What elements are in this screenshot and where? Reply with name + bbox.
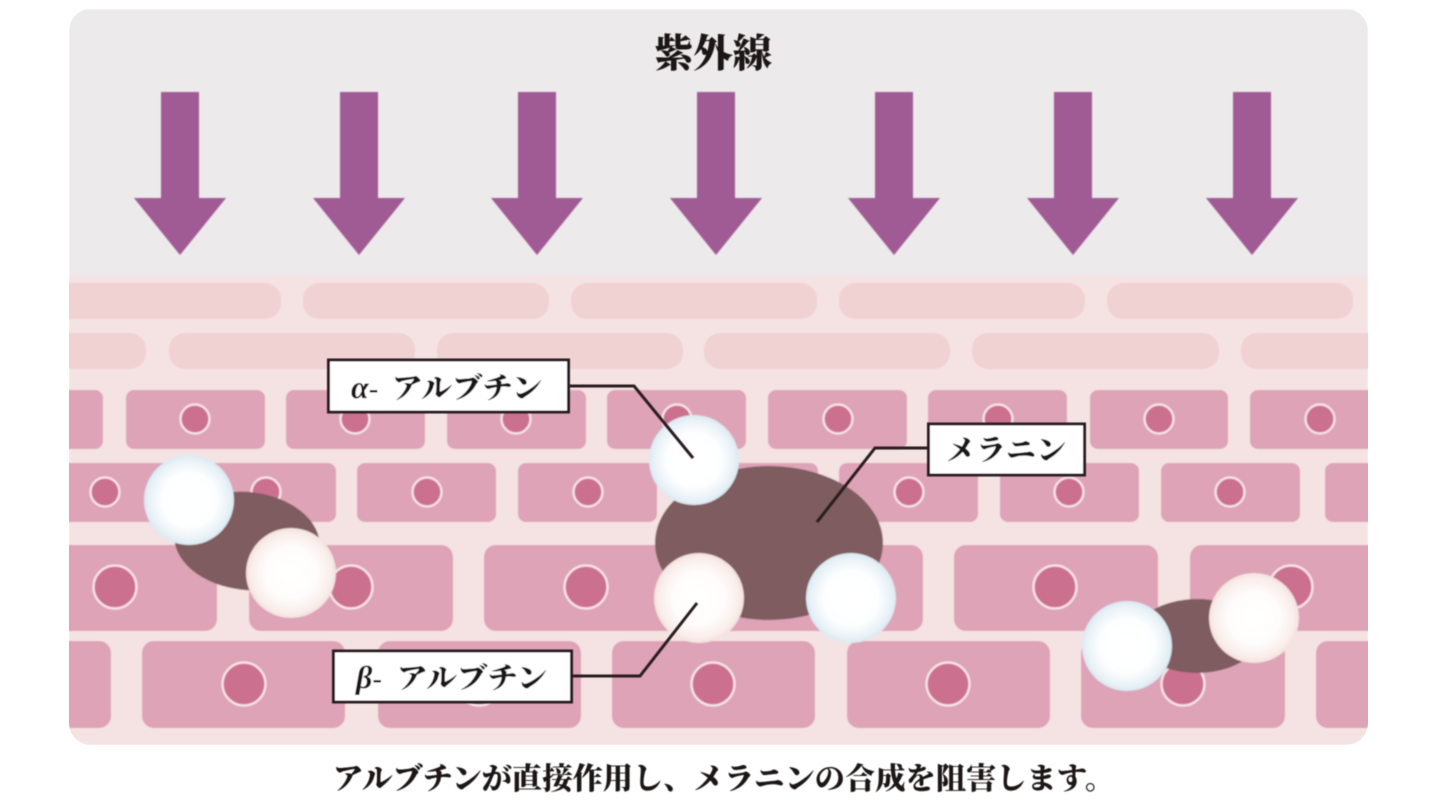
arrow 3	[491, 92, 583, 255]
arrow 2	[313, 92, 405, 255]
sphere: alpha-arbutin right	[1082, 601, 1172, 691]
sphere: beta-arbutin center	[654, 553, 744, 643]
cell row 4	[40, 463, 1405, 522]
title: 紫外線	[654, 33, 772, 76]
callout: melanin: メラニン	[946, 435, 1066, 467]
melanin: left	[174, 490, 320, 592]
callout: beta-arbutin	[334, 603, 697, 702]
callout: melanin	[817, 424, 1084, 522]
melanin: center	[655, 466, 883, 620]
sphere: alpha-arbutin center right	[806, 553, 896, 643]
callout: alpha-arbutin	[328, 360, 693, 458]
callout: alpha-arbutin: α-	[351, 369, 378, 405]
melanin: right	[1153, 598, 1242, 674]
callout: beta-arbutin: β-	[356, 659, 382, 695]
cell row 5	[40, 545, 1400, 631]
arrow 6	[1027, 92, 1119, 255]
panel: skin background	[69, 275, 1368, 745]
cell row 3	[40, 390, 1400, 449]
cell row 6	[40, 641, 1406, 728]
sphere: alpha-arbutin center top	[649, 415, 739, 505]
arrow 4	[670, 92, 762, 255]
arrows: ultraviolet rays	[134, 92, 1298, 255]
sphere: alpha-arbutin left	[144, 455, 234, 545]
callout: beta-arbutin: アルブチン	[397, 662, 547, 695]
stratum corneum row 2	[40, 333, 1401, 369]
arrow 5	[848, 92, 940, 255]
sphere: beta-arbutin right	[1209, 573, 1299, 663]
sphere: beta-arbutin left	[246, 528, 336, 618]
caption: アルブチンが直接作用し、メラニンの合成を阻害します。	[333, 763, 1115, 796]
callout: alpha-arbutin: アルブチン	[392, 372, 542, 405]
panel: ultraviolet sky	[69, 9, 1368, 277]
arrow 1	[134, 92, 226, 255]
arrow 7	[1206, 92, 1298, 255]
stratum corneum row 1	[40, 283, 1353, 319]
